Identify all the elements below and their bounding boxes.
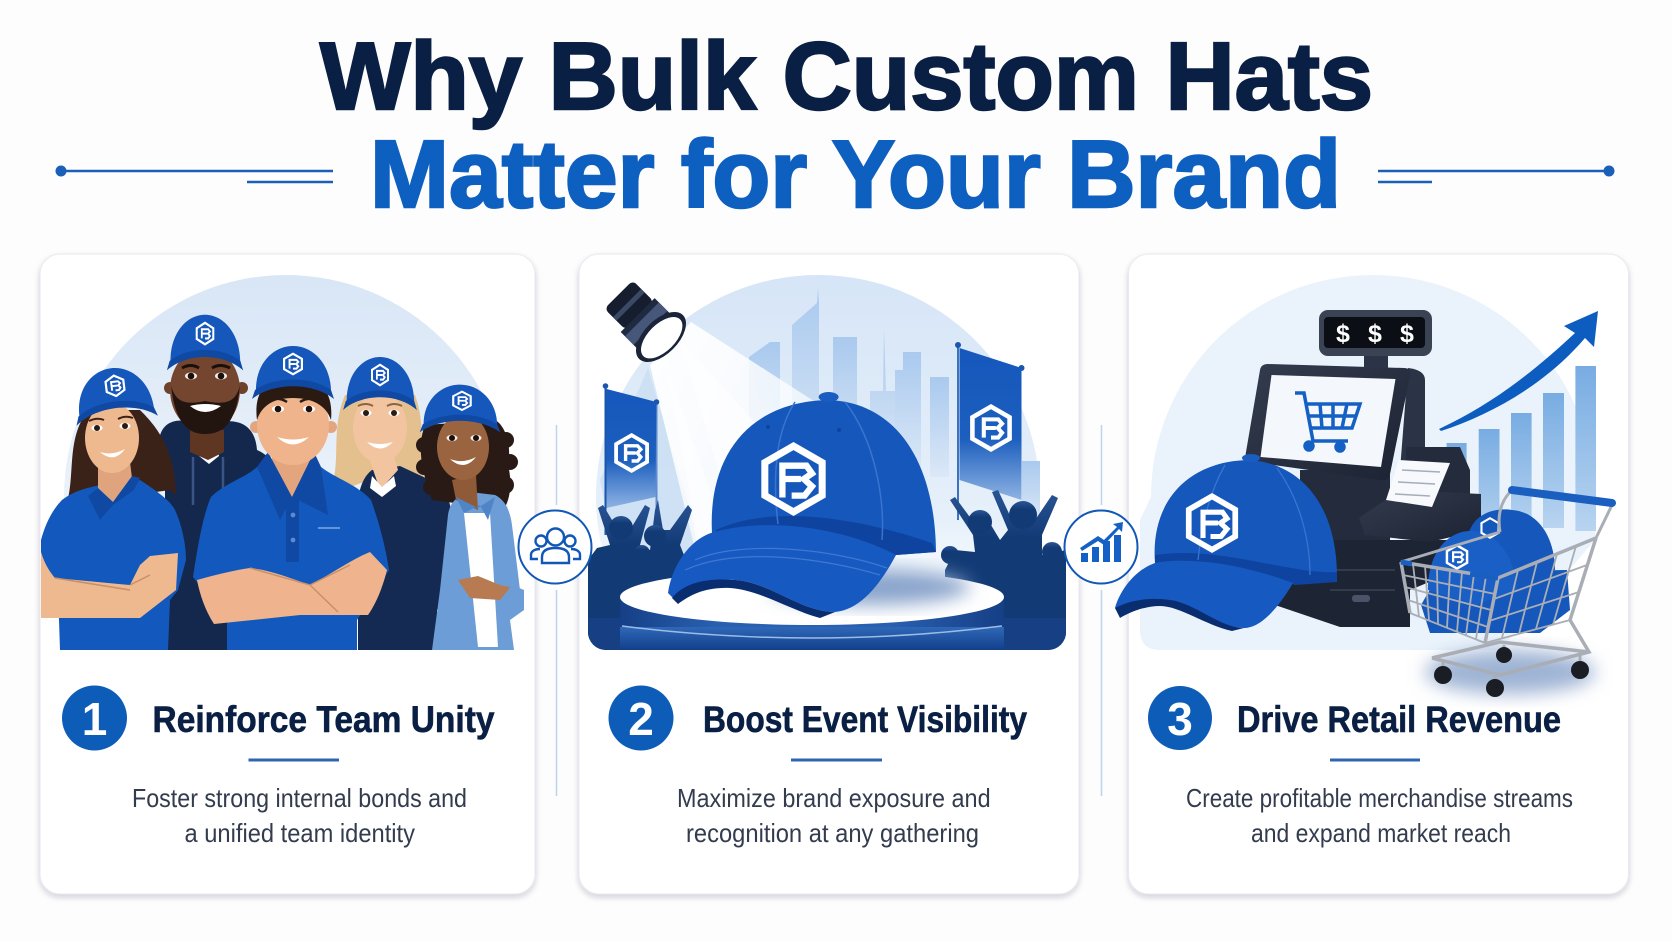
title: Why Bulk Custom Hats — [320, 23, 1373, 130]
price display: $ — [1336, 320, 1350, 348]
panel: boost event visibility — [579, 254, 1079, 894]
body text 2: Maximize brand exposure and — [677, 783, 991, 813]
blue cap with logo — [1115, 454, 1337, 631]
body text 2: recognition at any gathering — [686, 818, 979, 848]
shopping cart with caps — [1401, 490, 1612, 697]
number badge 1 — [62, 686, 127, 750]
person: man in blue polo — [193, 346, 389, 650]
podium — [620, 569, 1004, 650]
left flag — [603, 383, 659, 535]
blue cap — [668, 392, 936, 618]
body text 3: and expand market reach — [1251, 818, 1511, 848]
caps in cart — [1421, 509, 1570, 633]
number badge 2 — [608, 686, 674, 750]
bar chart — [1447, 366, 1596, 539]
title — [320, 23, 1373, 228]
body text 1 — [132, 783, 467, 848]
price display: $ — [1400, 320, 1414, 348]
receipt printer — [1359, 447, 1481, 542]
cart wire frame — [1401, 492, 1612, 685]
right flag — [955, 342, 1024, 520]
icon: cart on screen — [1295, 393, 1360, 451]
title: Matter for Your Brand — [370, 121, 1341, 228]
body text 2 — [677, 783, 991, 848]
cash drawer — [1275, 470, 1470, 627]
body text 3 — [1186, 783, 1573, 848]
price display: $ — [1368, 320, 1382, 348]
spotlight — [606, 282, 686, 362]
city skyline — [749, 288, 1040, 521]
crowd right — [941, 490, 1066, 650]
icon: growth connector — [1064, 510, 1138, 584]
number badge 3 — [1148, 686, 1212, 750]
heading 2: Boost Event Visibility — [703, 699, 1027, 740]
heading 1: Reinforce Team Unity — [152, 699, 495, 740]
panel: reinforce team unity — [40, 254, 535, 894]
body text 3: Create profitable merchandise streams — [1186, 783, 1573, 813]
spotlight beams — [600, 322, 820, 570]
person: blond woman — [330, 357, 454, 650]
number badge 3: 3 — [1167, 693, 1193, 745]
base band — [588, 618, 1066, 650]
illustration: hat on spotlit podium — [588, 275, 1066, 650]
body text 1: Foster strong internal bonds and — [132, 783, 467, 813]
number badge 2: 2 — [628, 693, 654, 745]
pos monitor — [1246, 364, 1425, 480]
illustration: team in caps — [41, 275, 524, 650]
price display — [1319, 310, 1432, 370]
icon: team connector — [518, 510, 592, 584]
body text 1: a unified team identity — [184, 818, 415, 848]
person: woman with brown hair — [41, 363, 186, 650]
panel: drive retail revenue — [1115, 254, 1628, 894]
number badge 1: 1 — [82, 693, 107, 745]
illustration background arch — [1140, 275, 1595, 650]
growth arrow — [1439, 311, 1598, 431]
crowd left — [588, 500, 700, 650]
person: woman in denim shirt — [416, 385, 524, 650]
person: man in navy hoodie — [160, 314, 266, 650]
heading 3: Drive Retail Revenue — [1237, 699, 1561, 740]
